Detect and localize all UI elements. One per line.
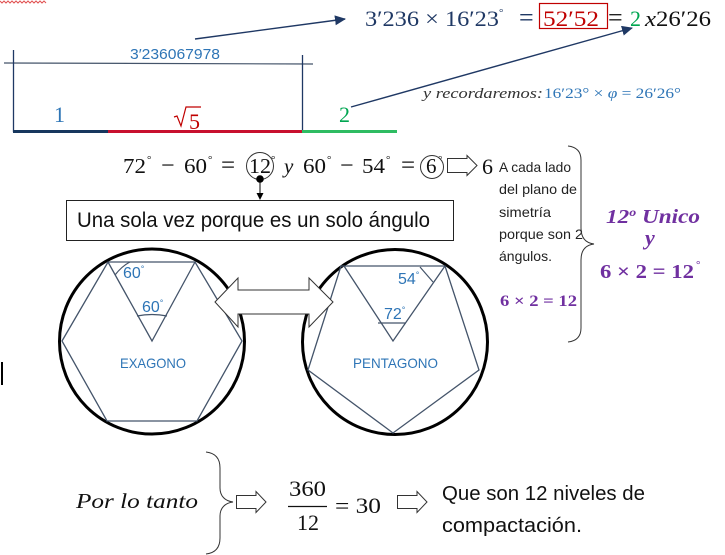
final conclusion: Que son 12 niveles de [442,483,645,505]
top angle label: 60 [123,265,141,282]
center angle label: ° [160,298,164,308]
top equation: 2 [630,6,641,31]
angle equation: = [401,152,415,179]
top equation: = [519,3,534,32]
segment root 5 [108,130,302,133]
highlighted result box [540,4,608,31]
top equation: ° [499,7,503,19]
pentagon diagram [302,250,488,434]
callout box [66,200,454,240]
por lo tanto: Por lo tanto [75,489,198,513]
angle equation: y [282,154,294,178]
fraction [288,476,381,535]
conclusion text [600,205,700,283]
top equation: 3′236 × 16′23 [365,6,499,31]
top equation [365,3,711,32]
arrow: to top equation [195,19,345,39]
label 2: 2 [339,102,350,127]
arrow: from 2 to equation [351,28,632,107]
center angle label: ° [402,305,406,315]
fraction: = 30 [335,493,381,518]
inner triangle [108,262,195,341]
connector from 12 to box [256,175,264,200]
circled 12 [246,152,274,180]
conclusion text: 12 [606,206,626,228]
side explanation text: ángulos. [499,248,552,264]
top angle label: ° [141,264,145,274]
angle equation: ° [327,154,331,166]
angle equation: 60 [303,154,326,178]
angle equation [123,152,493,179]
center angle label: 72 [384,306,402,323]
angle equation: 12 [249,154,271,178]
right brace [568,146,594,342]
conclusion text: ° [696,259,700,271]
top equation: = [608,3,623,32]
angle equation: 6 [426,154,436,178]
angle equation: 60 [184,154,207,178]
side explanation text: A cada lado [499,159,571,175]
fraction: 360 [289,476,326,501]
angle equation: − [161,153,175,179]
arrow: to fraction [236,492,266,512]
angle equation: ° [386,154,390,166]
arrow: to conclusion [398,492,427,512]
angle equation: 6 [482,154,493,179]
angle marks [378,267,433,323]
pentagon name: PENTAGONO [353,355,438,371]
text cursor [1,362,3,385]
label root 5: 5 [189,109,200,134]
top angle label: 54 [398,271,416,288]
note: y recordaremos: y recordaremos: [421,86,543,102]
fraction: 12 [297,510,319,535]
conclusion text: y [642,225,655,250]
conclusion text: o [629,205,636,219]
purple product: 6 × 2 = 12 [500,293,577,310]
center angle label: 60 [142,299,160,316]
angle equation: ° [208,154,212,166]
note: y recordaremos: 16′23° × φ = 26′26° [544,86,681,102]
arrow: to six [448,156,477,176]
inner triangle [344,266,445,341]
angle equation: ° [438,154,442,166]
segment diagram [4,46,397,134]
angle marks [115,262,167,316]
side explanation text: porque son 2 [499,226,583,242]
length label: 3′236067978 [130,46,220,63]
hexagon [62,262,242,421]
side explanation text: del plano de [499,181,577,197]
side explanation text [499,159,583,264]
hexagon name: EXAGONO [120,355,186,371]
hexagon diagram [60,249,244,434]
angle equation: = [221,152,235,179]
conclusion text: Unico [636,206,700,228]
top angle label: ° [416,270,420,280]
callout box: Una sola vez porque es un solo ángulo [77,209,430,232]
label 1: 1 [54,102,65,127]
note: y recordaremos [421,86,681,102]
pentagon [308,266,479,433]
segment 1 [13,130,108,133]
angle equation: − [340,153,354,179]
angle equation: ° [271,154,275,166]
angle equation: ° [147,154,151,166]
circled 6 [420,156,444,178]
conclusion text: 6 × 2 = 12 [600,261,694,283]
final conclusion [442,483,645,537]
bottom brace [206,452,233,554]
spell-check squiggle [0,1,46,3]
segment 2 [302,130,397,133]
top equation: x26′26 [644,6,711,31]
label root 5 [174,107,201,134]
angle equation: 72 [123,154,146,178]
final conclusion: compactación. [442,515,582,537]
angle equation: 54 [362,154,386,178]
double arrow [215,278,333,327]
side explanation text: simetría [499,204,551,220]
highlighted result box: 52′52 [543,6,599,31]
